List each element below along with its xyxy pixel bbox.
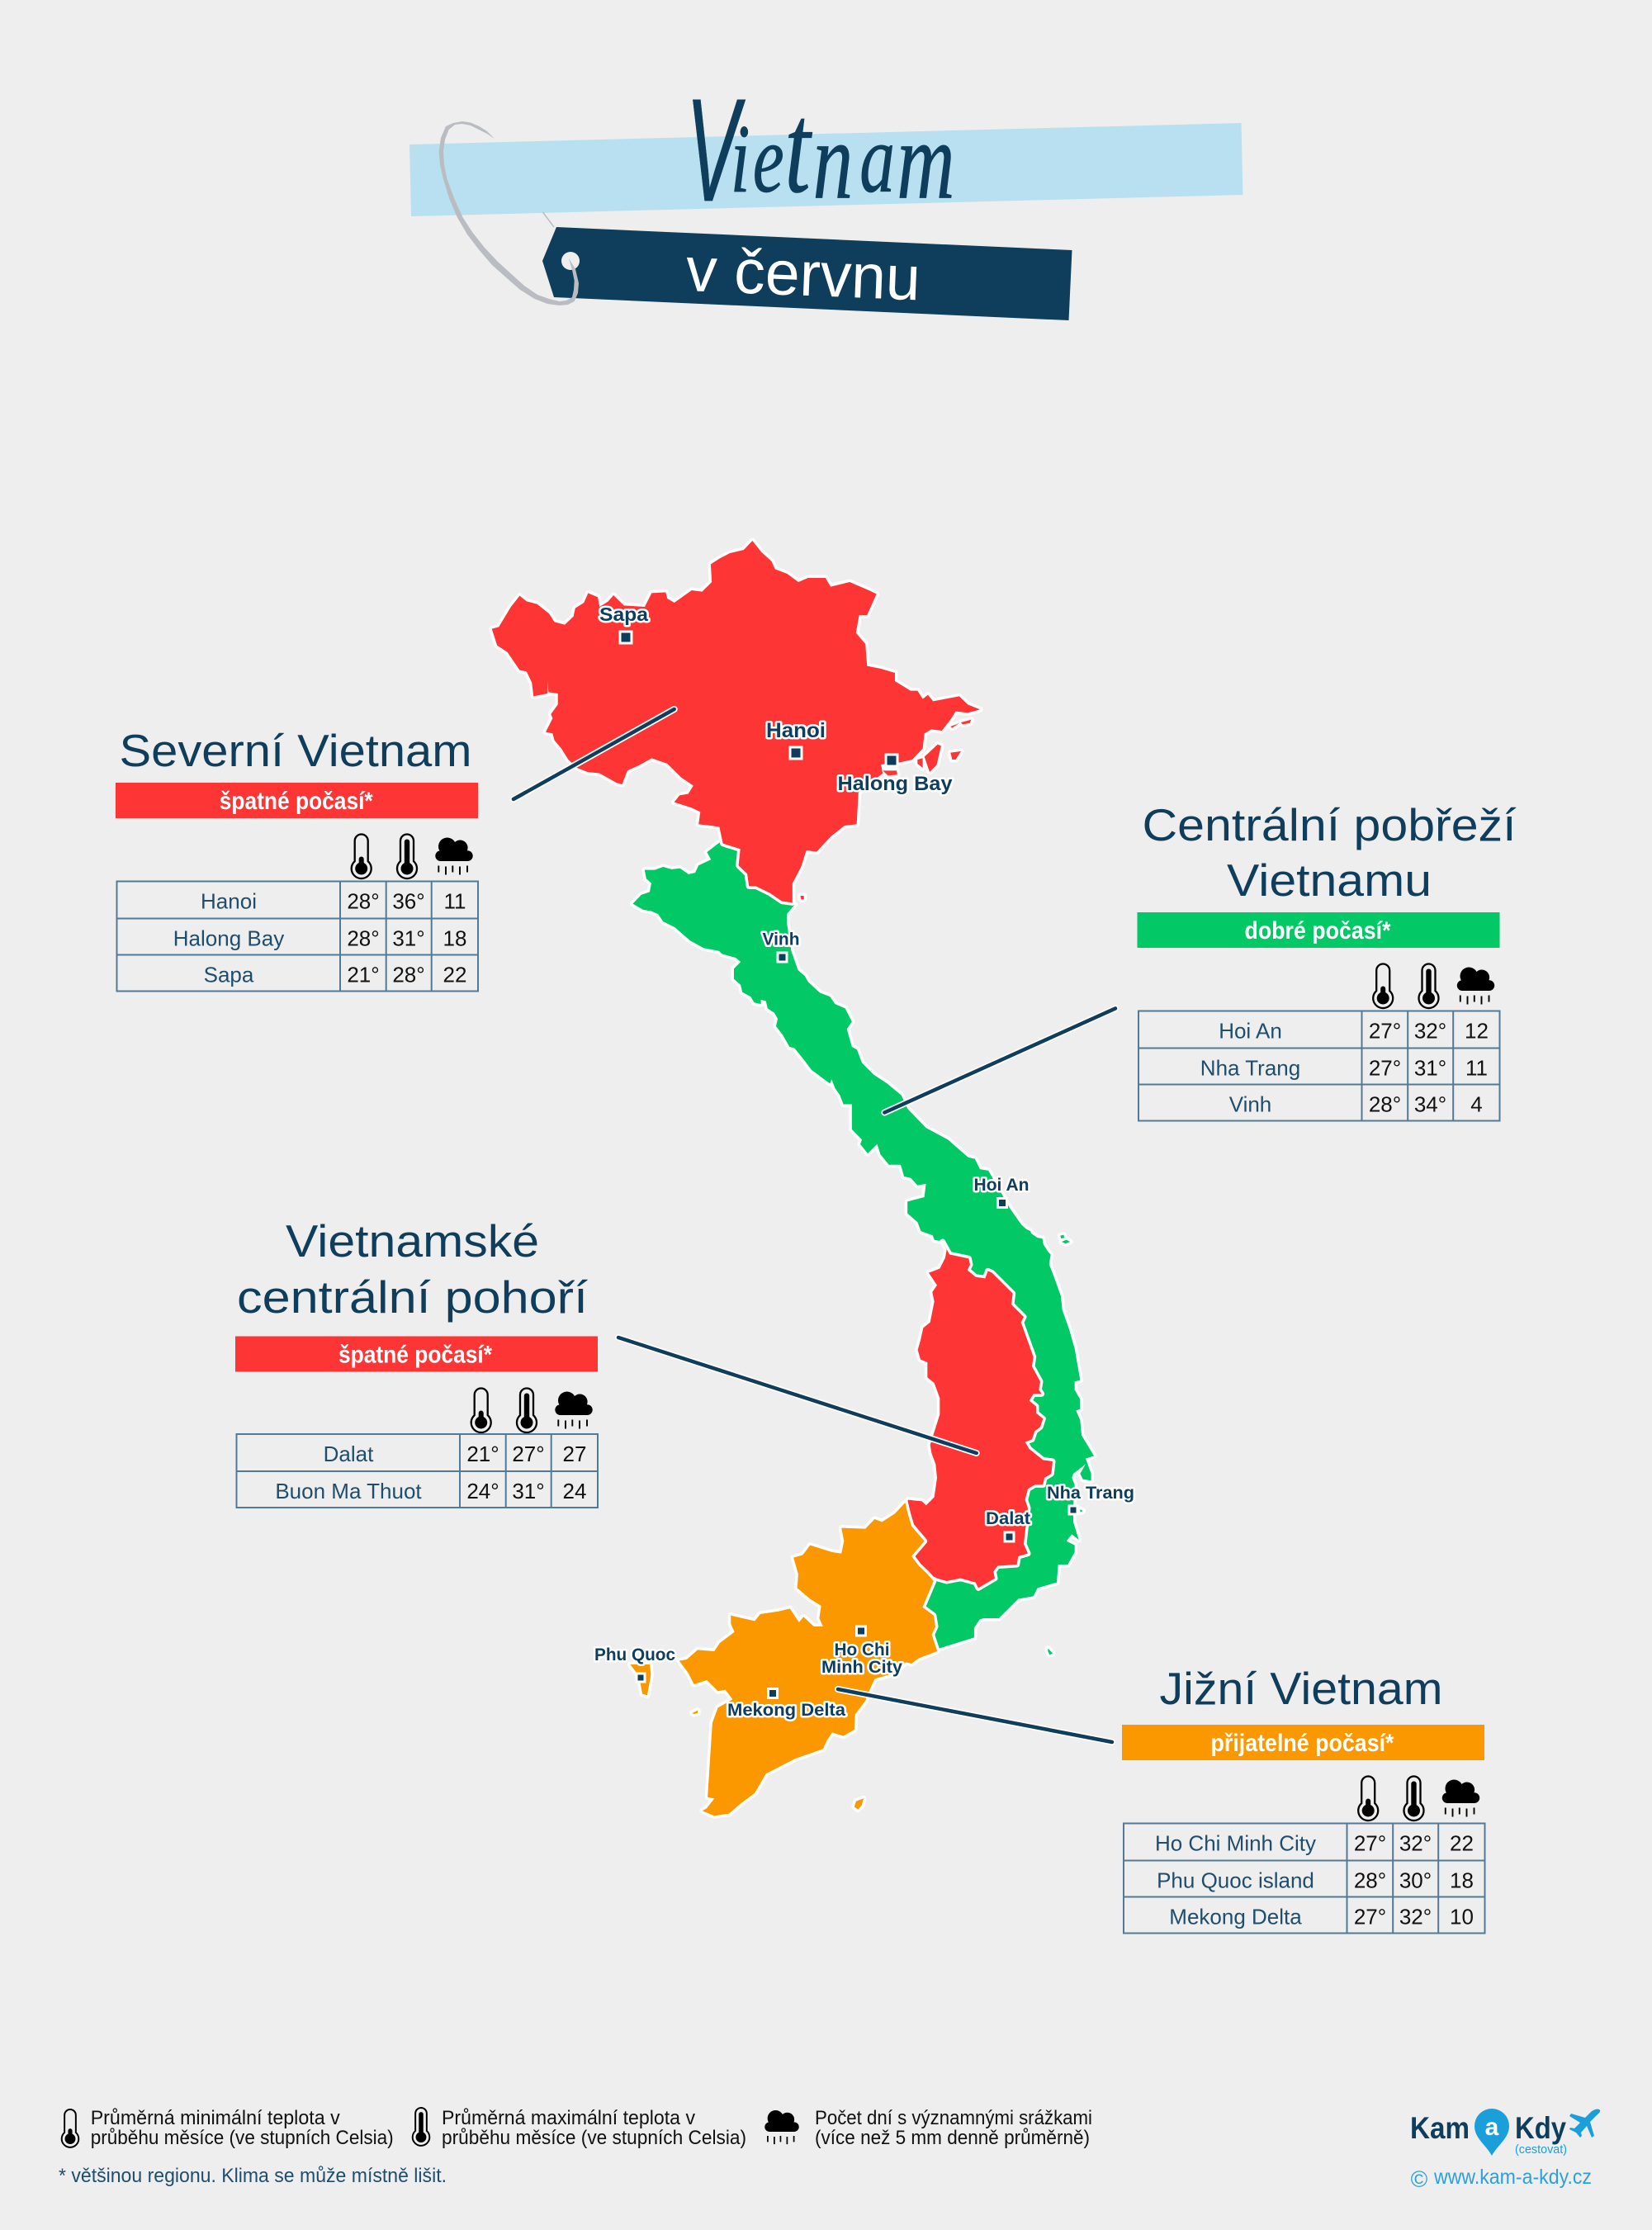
city: Halong Bay: Halong Bay [837,773,953,795]
city: Halong Bay [837,755,953,795]
subtitle v červnu: v červnu [684,234,922,314]
region: central coast (green) [633,842,1094,1655]
legend: minimum temperature: průběhu měsíce (ve stupních Celsia) [91,2127,394,2149]
tagline: (cestovat) [1515,2142,1567,2157]
climate table: 11 [1465,1055,1488,1080]
light blue title band [409,123,1243,216]
city: Ho Chi Minh City: Ho Chi [834,1641,890,1659]
city: Vinh: Vinh [763,930,799,949]
climate table: 27° [1369,1055,1401,1080]
legend: minimum temperature: Průměrná minimální teplota v [91,2107,340,2129]
map pin: a [1485,2114,1499,2141]
climate table: 27° [1354,1904,1386,1929]
climate table: 31° [1414,1055,1446,1080]
climate table: 36° [392,888,425,913]
city: Ho Chi Minh City: Minh City [821,1658,902,1677]
climate table: Phu Quoc island [1157,1868,1314,1892]
climate table: 4 [1470,1091,1483,1116]
tag hole [561,252,580,270]
city: Hanoi [766,719,826,759]
climate table: 27° [1354,1831,1386,1856]
airplane icon [1569,2109,1600,2138]
city: Mekong Delta: Mekong Delta [727,1701,845,1720]
rating banner: přijatelné počasí* [1210,1730,1394,1757]
region: south Vietnam (orange) [630,1503,937,1816]
climate table: 11 [444,888,466,913]
map of Vietnam [492,541,1094,1816]
city: Phu Quoc: Phu Quoc [594,1645,675,1664]
rating banner [1138,912,1499,948]
climate table: 28° [347,926,380,951]
climate table: 34° [1414,1091,1446,1116]
city: Hoi An [974,1176,1029,1207]
panel: Severní Vietnam [116,725,478,991]
climate table: 32° [1414,1019,1446,1044]
climate table: Mekong Delta [1169,1904,1302,1929]
legend [62,2107,1092,2149]
city: Sapa [599,604,648,643]
legend: maximum temperature [413,2107,746,2149]
rating banner: špatné počasí* [338,1341,492,1369]
rating banner [1122,1725,1484,1760]
website: www.kam-a-kdy.cz [1433,2166,1592,2189]
climate table: 31° [392,926,425,951]
climate table: Buon Ma Thuot [275,1479,422,1503]
city: Hoi An: Hoi An [974,1176,1029,1195]
climate table: Sapa [204,963,254,987]
city: Mekong Delta [727,1689,845,1720]
title word Vietnam [686,69,954,233]
legend: rain days: (více než 5 mm denně průměrně) [815,2127,1090,2149]
leader line: highlands [618,1338,977,1453]
climate table: 24° [466,1479,499,1503]
climate table: Hoi An [1219,1019,1282,1044]
climate table: 28° [347,888,380,913]
website: © [1411,2166,1428,2192]
heading: Centrální pobřeží [1143,799,1517,850]
dark tag [542,227,1072,320]
title word Vietnam: V [686,69,746,233]
legend: minimum temperature [62,2107,394,2149]
climate table: 30° [1399,1868,1432,1892]
leader line: north [514,709,675,799]
city: Hanoi: Hanoi [766,719,826,742]
title word Vietnam: n [813,99,853,222]
legend: maximum temperature: průběhu měsíce (ve stupních Celsia) [442,2127,746,2149]
city markers and labels [594,604,1134,1720]
heading [237,1215,589,1323]
title word Vietnam: a [859,106,895,213]
climate table: 32° [1399,1904,1432,1929]
heading: Vietnamské [286,1215,539,1267]
heading: Severní Vietnam [119,725,472,776]
climate table: Halong Bay [173,926,284,951]
climate table: 27° [512,1442,545,1466]
title word Vietnam: t [784,78,812,220]
climate table: 22 [443,963,466,987]
region: central highlands (red) [906,1242,1053,1588]
wordmark Kam: Kam [1410,2111,1470,2145]
heading [1143,799,1517,906]
climate table: Hanoi [201,888,257,913]
city: Dalat [986,1509,1030,1541]
climate table [236,1389,598,1508]
map pin [1474,2109,1509,2156]
climate table: Dalat [324,1442,374,1466]
city: Nha Trang: Nha Trang [1047,1484,1134,1503]
title: banner and luggage tag [409,69,1243,320]
rating banner: dobré počasí* [1245,917,1391,945]
climate table: 28° [392,963,425,987]
heading: Vietnamu [1227,855,1432,906]
climate table: 28° [1354,1868,1386,1892]
climate table: 18 [443,926,466,951]
city: Vinh [763,930,799,962]
rating banner [235,1336,598,1372]
legend: rain days: Počet dní s významnými srážkami [815,2107,1092,2129]
climate table: 27 [563,1442,586,1466]
climate table: 12 [1465,1019,1489,1044]
city: Nha Trang [1047,1484,1134,1514]
climate table: 28° [1369,1091,1401,1116]
climate table: 18 [1450,1868,1474,1892]
city: Phu Quoc [594,1645,675,1682]
heading: centrální pohoří [237,1271,589,1323]
climate table: 27° [1369,1019,1401,1044]
climate table: 32° [1399,1831,1432,1856]
climate table [1138,964,1499,1121]
city: Ho Chi Minh City [821,1626,902,1677]
string loop [439,121,579,305]
panel: Jižní Vietnam [1122,1663,1484,1934]
legend: rain days [764,2107,1092,2149]
climate table: 31° [512,1479,545,1503]
rating banner: špatné počasí* [220,788,373,815]
panel: Vietnamské centrální pohoří [235,1215,598,1508]
footnote: * většinou regionu. Klima se může místně lišit. [59,2165,447,2187]
climate table: 22 [1450,1831,1474,1856]
city: Sapa: Sapa [599,604,648,625]
climate table: 10 [1450,1904,1474,1929]
climate table: 21° [466,1442,499,1466]
climate table [117,834,478,991]
climate table: Ho Chi Minh City [1155,1831,1316,1856]
heading: Jižní Vietnam [1159,1663,1443,1714]
title word Vietnam: ie [731,106,784,213]
panel: Centrální pobřeží Vietnamu [1138,799,1517,1121]
legend: maximum temperature: Průměrná maximální teplota v [442,2107,695,2129]
leader line: central coast [884,1008,1115,1113]
climate table: 24 [563,1479,586,1503]
climate table [1124,1777,1484,1934]
climate table: 21° [347,963,380,987]
logo [1410,2109,1600,2192]
climate table: Vinh [1229,1091,1271,1116]
rating banner [116,783,478,818]
climate table: Nha Trang [1200,1055,1300,1080]
city: Dalat: Dalat [986,1509,1030,1528]
wordmark Kdy: Kdy [1515,2111,1566,2145]
leader line: south [838,1689,1112,1742]
region: north Vietnam (red) [492,541,980,902]
title word Vietnam: m [897,99,954,222]
